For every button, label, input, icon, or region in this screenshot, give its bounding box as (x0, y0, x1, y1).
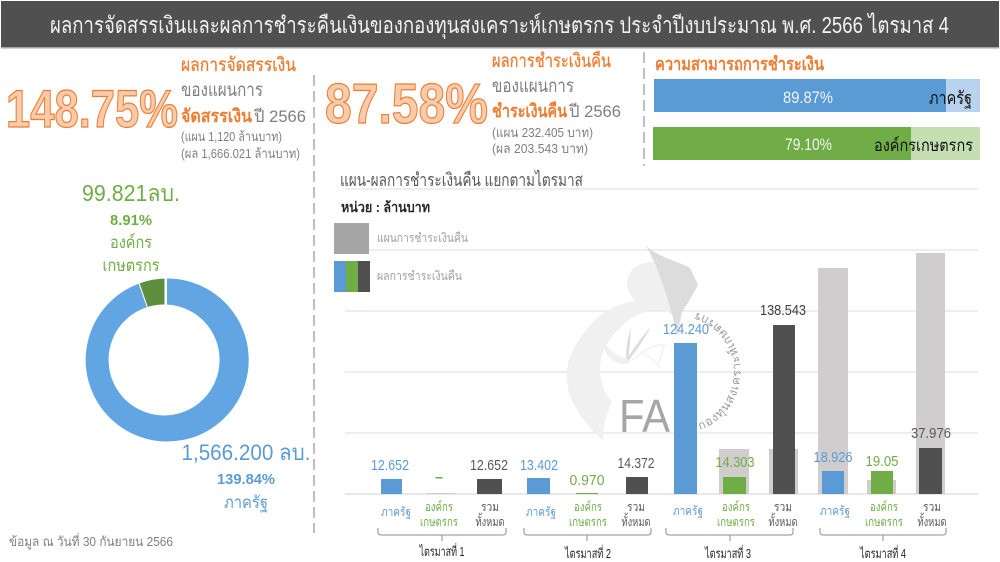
value labels: 12.652 (371, 458, 409, 474)
label: agricultural organizations: เกษตรกร (102, 256, 160, 275)
bar: government sector: ภาครัฐ (929, 88, 972, 109)
label: government sector: ภาครัฐ (224, 493, 268, 513)
value labels: 12.652 (470, 458, 508, 474)
allocation description: (แผน 1,120 ล้านบาท) (181, 129, 282, 144)
category labels: รวม (774, 500, 792, 514)
source note: ข้อมูล ณ วันที่ 30 กันยายน 2566 (9, 533, 173, 550)
category labels: รวม (627, 500, 645, 514)
unit label: หน่วย : ล้านบาท (341, 199, 430, 215)
category labels: องค์กร (722, 500, 750, 514)
allocation description: จัดสรรเงิน (181, 106, 253, 126)
allocation heading: ผลการจัดสรรเงิน (181, 55, 296, 76)
category labels: ภาครัฐ (381, 505, 411, 519)
allocation description (181, 80, 306, 161)
quarter labels: ไตรมาสที่ 4 (859, 545, 906, 561)
category labels: องค์กร (425, 500, 453, 514)
label: agricultural organizations: 99.821ลบ. (82, 180, 180, 206)
repayment description: ของแผนการ (492, 76, 574, 97)
legend (334, 223, 468, 292)
plan bars (426, 253, 945, 494)
bar: government sector: 89.87% (783, 88, 833, 107)
value labels: 138.543 (760, 303, 806, 319)
category labels: องค์กร (574, 500, 602, 514)
panel: allocation result (6, 55, 306, 161)
value labels: 124.240 (663, 322, 709, 338)
category labels: รวม (481, 500, 499, 514)
allocation description: ปี 2566 (253, 107, 306, 126)
title banner (1, 1, 999, 48)
value labels: 13.402 (520, 458, 558, 474)
repayment description (492, 76, 621, 156)
watermark logo: กองทุนสงเคราะห์เกษตรกร (694, 312, 741, 430)
watermark logo (566, 246, 741, 442)
watermark logo: FA (619, 390, 670, 442)
value labels: 37.976 (911, 426, 951, 442)
panel: repayment ability (653, 54, 980, 160)
category labels: ภาครัฐ (820, 504, 850, 518)
quarter labels: ไตรมาสที่ 2 (564, 545, 611, 561)
category labels: ทั้งหมด (918, 512, 946, 529)
value labels: 18.926 (814, 450, 852, 466)
value labels: 14.372 (618, 456, 654, 472)
allocation description: (ผล 1,666.021 ล้านบาท) (181, 146, 300, 161)
actual bars: agricultural organizations (576, 471, 893, 494)
category labels: รวม (923, 500, 941, 514)
repayment heading: ผลการชำระเงินคืน (492, 51, 611, 72)
category labels: ทั้งหมด (622, 512, 650, 529)
bar: agricultural organizations: 79.10% (785, 135, 832, 154)
donut ring (85, 278, 249, 442)
repayment description: (แผน 232.405 บาท) (492, 125, 593, 140)
category labels: เกษตรกร (865, 515, 903, 529)
repayment percentage: 87.58% (325, 72, 488, 136)
label: agricultural organizations: องค์กร (110, 233, 152, 252)
value labels: 14.303 (716, 455, 754, 471)
label: government sector: 139.84% (217, 471, 275, 488)
legend: plan: แผนการชำระเงินคืน (377, 231, 468, 245)
label: agricultural organizations (82, 180, 180, 275)
chart heading: แผน-ผลการชำระเงินคืน แยกตามไตรมาส (340, 169, 583, 190)
category labels: ภาครัฐ (526, 505, 556, 519)
repayment description: (ผล 203.543 บาท) (492, 141, 588, 156)
value labels: – (435, 470, 443, 486)
value labels (371, 303, 951, 489)
bar: agricultural organizations: องค์กรเกษตรกร (874, 136, 973, 155)
allocation percentage: 148.75% (6, 80, 178, 139)
actual bars: government sector (381, 343, 844, 494)
panel: donut chart (82, 180, 310, 513)
legend: actual: ผลการชำระเงินคืน (377, 269, 462, 283)
quarter labels: ไตรมาสที่ 1 (419, 543, 464, 559)
bar: government sector (654, 79, 980, 112)
category labels: เกษตรกร (717, 515, 755, 529)
value labels: 19.05 (866, 454, 898, 470)
repayment description: ชำระเงินคืน (492, 101, 568, 121)
bar chart: plan vs actual by quarter (345, 253, 978, 561)
category labels: ทั้งหมด (476, 512, 504, 529)
category labels: ทั้งหมด (768, 512, 798, 529)
category labels: เกษตรกร (420, 515, 458, 529)
quarter labels (419, 543, 906, 561)
category labels: เกษตรกร (569, 515, 607, 529)
quarter brackets (378, 528, 946, 541)
label: government sector (182, 440, 310, 513)
bar: agricultural organizations (653, 127, 980, 160)
category labels (381, 500, 946, 529)
actual bars: total (477, 325, 942, 494)
ability heading: ความสามารถการชำระเงิน (655, 54, 825, 74)
quarter labels: ไตรมาสที่ 3 (704, 545, 751, 561)
value labels: 0.970 (570, 473, 604, 489)
panel: repayment result (325, 51, 621, 156)
label: government sector: 1,566.200 ลบ. (182, 440, 310, 465)
label: agricultural organizations: 8.91% (110, 212, 152, 229)
repayment description: ปี 2566 (568, 102, 621, 121)
category labels: องค์กร (870, 500, 898, 514)
allocation description: ของแผนการ (181, 80, 263, 101)
category labels: ภาครัฐ (673, 504, 703, 518)
